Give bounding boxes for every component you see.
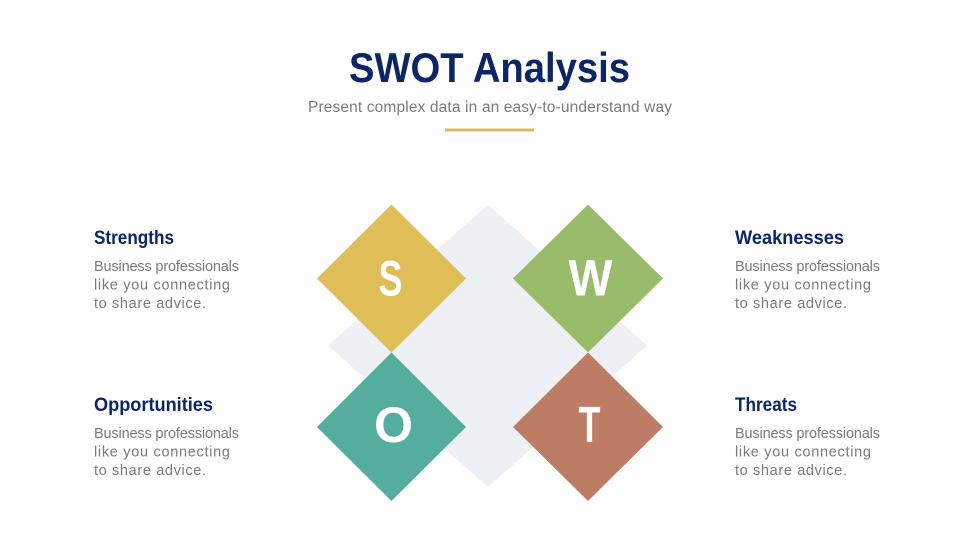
weaknesses body: to share advice. bbox=[735, 296, 847, 312]
weaknesses body: like you connecting bbox=[735, 278, 871, 294]
strengths diamond bbox=[317, 204, 466, 352]
opportunities diamond: O bbox=[374, 397, 413, 453]
threats body: to share advice. bbox=[735, 463, 847, 479]
opportunities body: like you connecting bbox=[94, 444, 230, 460]
strengths body: Business professionals bbox=[94, 259, 239, 275]
weaknesses body bbox=[735, 259, 880, 312]
swot diamond diagram bbox=[317, 204, 663, 501]
title accent line bbox=[445, 128, 534, 132]
strengths body: to share advice. bbox=[94, 296, 206, 312]
threats text block bbox=[735, 395, 880, 479]
strengths heading: Strengths bbox=[94, 228, 174, 249]
weaknesses text block bbox=[735, 228, 880, 312]
opportunities text block bbox=[94, 395, 239, 479]
threats diamond: T bbox=[578, 396, 600, 453]
background diamond bbox=[328, 205, 647, 487]
opportunities body: to share advice. bbox=[94, 463, 206, 479]
threats body: like you connecting bbox=[735, 444, 871, 460]
threats body bbox=[735, 426, 880, 479]
weaknesses body: Business professionals bbox=[735, 259, 880, 275]
subtitle: Present complex data in an easy-to-understand way bbox=[308, 99, 672, 116]
threats body: Business professionals bbox=[735, 426, 880, 442]
opportunities body bbox=[94, 426, 239, 479]
strengths body: like you connecting bbox=[94, 278, 230, 294]
strengths body bbox=[94, 259, 239, 312]
strengths diamond: S bbox=[378, 250, 402, 306]
opportunities body: Business professionals bbox=[94, 426, 239, 442]
title: SWOT Analysis bbox=[349, 44, 630, 91]
threats heading: Threats bbox=[735, 395, 797, 416]
weaknesses heading: Weaknesses bbox=[735, 228, 844, 249]
threats diamond bbox=[513, 352, 663, 501]
strengths text block bbox=[94, 228, 239, 312]
weaknesses diamond: W bbox=[568, 250, 613, 306]
opportunities heading: Opportunities bbox=[94, 395, 213, 416]
weaknesses diamond bbox=[513, 204, 663, 352]
opportunities diamond bbox=[317, 352, 466, 501]
